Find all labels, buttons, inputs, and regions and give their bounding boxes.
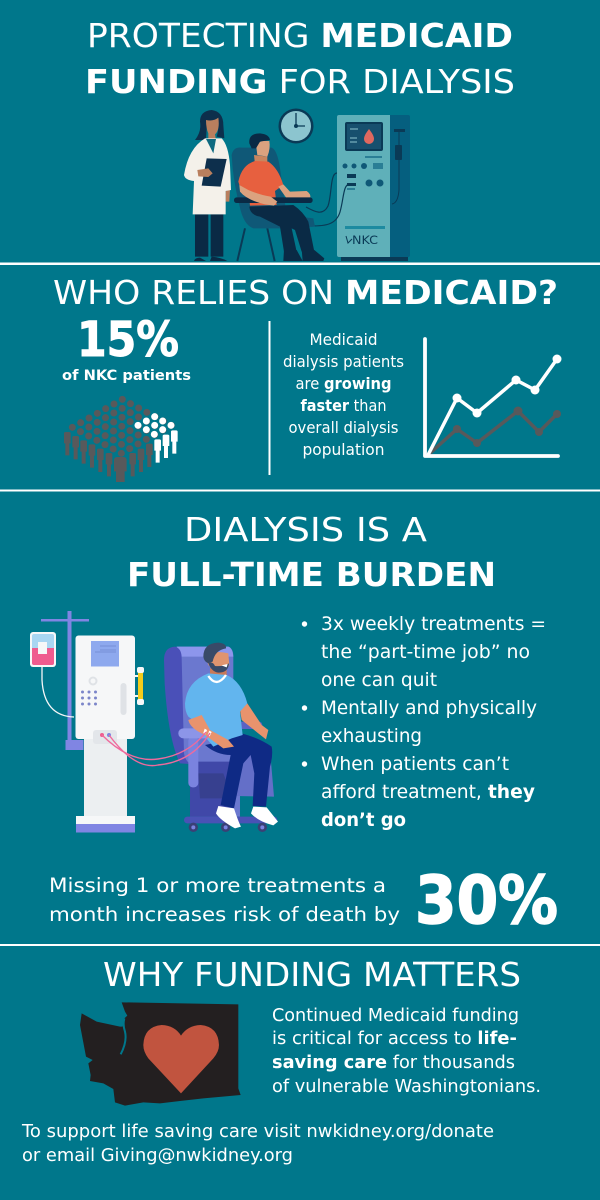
icon: crowd of people with 15 percent highlighted	[64, 396, 178, 482]
heading: who relies on Medicaid: WHO RELIES ON MEDICAID?	[53, 273, 558, 312]
heading: why funding matters: WHY FUNDING MATTERS	[103, 955, 521, 994]
icon: clinician with clipboard	[184, 110, 231, 261]
callout: missed treatments risk: month increases risk of death by	[49, 903, 400, 926]
bullet list: burden facts: the “part-time job” no	[321, 641, 530, 663]
bullet list: burden facts	[302, 613, 546, 831]
bullet list: burden facts: Mentally and physically	[321, 697, 537, 719]
text block: funding importance: saving care for thousands	[272, 1053, 515, 1073]
white highlighted people	[134, 413, 178, 463]
heading: full-time burden: FULL-TIME BURDEN	[127, 555, 496, 594]
callout: missed treatments risk: Missing 1 or more treatments a	[49, 874, 386, 897]
icon: reclining chair	[164, 647, 277, 832]
bullet list: burden facts: 3x weekly treatments =	[321, 613, 546, 635]
heading: full-time burden	[127, 510, 496, 594]
text block: funding importance: of vulnerable Washingtonians.	[272, 1077, 541, 1097]
text block: growth note: are growing	[296, 374, 392, 393]
stat: 15 percent: of NKC patients	[62, 368, 191, 384]
text block: growth note: faster than	[300, 396, 386, 415]
footer: call to action: To support life saving care visit nwkidney.org/donate	[21, 1122, 494, 1142]
title	[85, 16, 515, 101]
text block: funding importance	[272, 1006, 541, 1097]
text block: funding importance: Continued Medicaid funding	[272, 1006, 519, 1026]
text block: growth note: overall dialysis	[288, 418, 398, 437]
stat: 15 percent	[62, 312, 191, 384]
bullet list: burden facts: don’t go	[321, 809, 406, 831]
line chart: growth trend	[425, 339, 562, 456]
tubing	[102, 732, 210, 766]
divider between stat and trend	[268, 321, 270, 475]
text block: growth note: dialysis patients	[283, 352, 404, 371]
text block: growth note: Medicaid	[310, 330, 378, 349]
text block: funding importance: is critical for access to life-	[272, 1029, 517, 1049]
callout: missed treatments risk: 30%	[415, 862, 558, 939]
footer: call to action: or email Giving@nwkidney.org	[22, 1146, 293, 1166]
bullet list: burden facts: one can quit	[321, 669, 437, 691]
heading: full-time burden: DIALYSIS IS A	[184, 510, 427, 549]
icon: wall clock	[278, 108, 314, 144]
text block: growth note: population	[302, 440, 384, 459]
callout: missed treatments risk	[49, 862, 558, 939]
icon: dialysis machine	[306, 115, 410, 261]
title: FUNDING FOR DIALYSIS	[85, 62, 515, 101]
illustration: clinician and patient at dialysis machine	[184, 108, 410, 261]
bullet list: burden facts: exhausting	[321, 725, 422, 747]
title: PROTECTING MEDICAID	[87, 16, 513, 55]
icon: dialysis machine	[76, 636, 144, 832]
icon: Washington state with heart	[80, 1002, 241, 1106]
illustration: patient on dialysis chair with machine	[30, 611, 278, 832]
icon: IV pole and bag	[30, 611, 89, 750]
footer: call to action	[21, 1122, 494, 1166]
text block: growth note	[283, 330, 404, 459]
stat: 15 percent: 15%	[77, 312, 179, 368]
icon: patient	[185, 643, 278, 828]
bullet list: burden facts: When patients can’t	[321, 753, 509, 775]
icon: dialysis machine: NKC	[352, 233, 378, 247]
bullet list: burden facts: afford treatment, they	[321, 781, 536, 803]
icon: patient in chair	[232, 133, 324, 261]
